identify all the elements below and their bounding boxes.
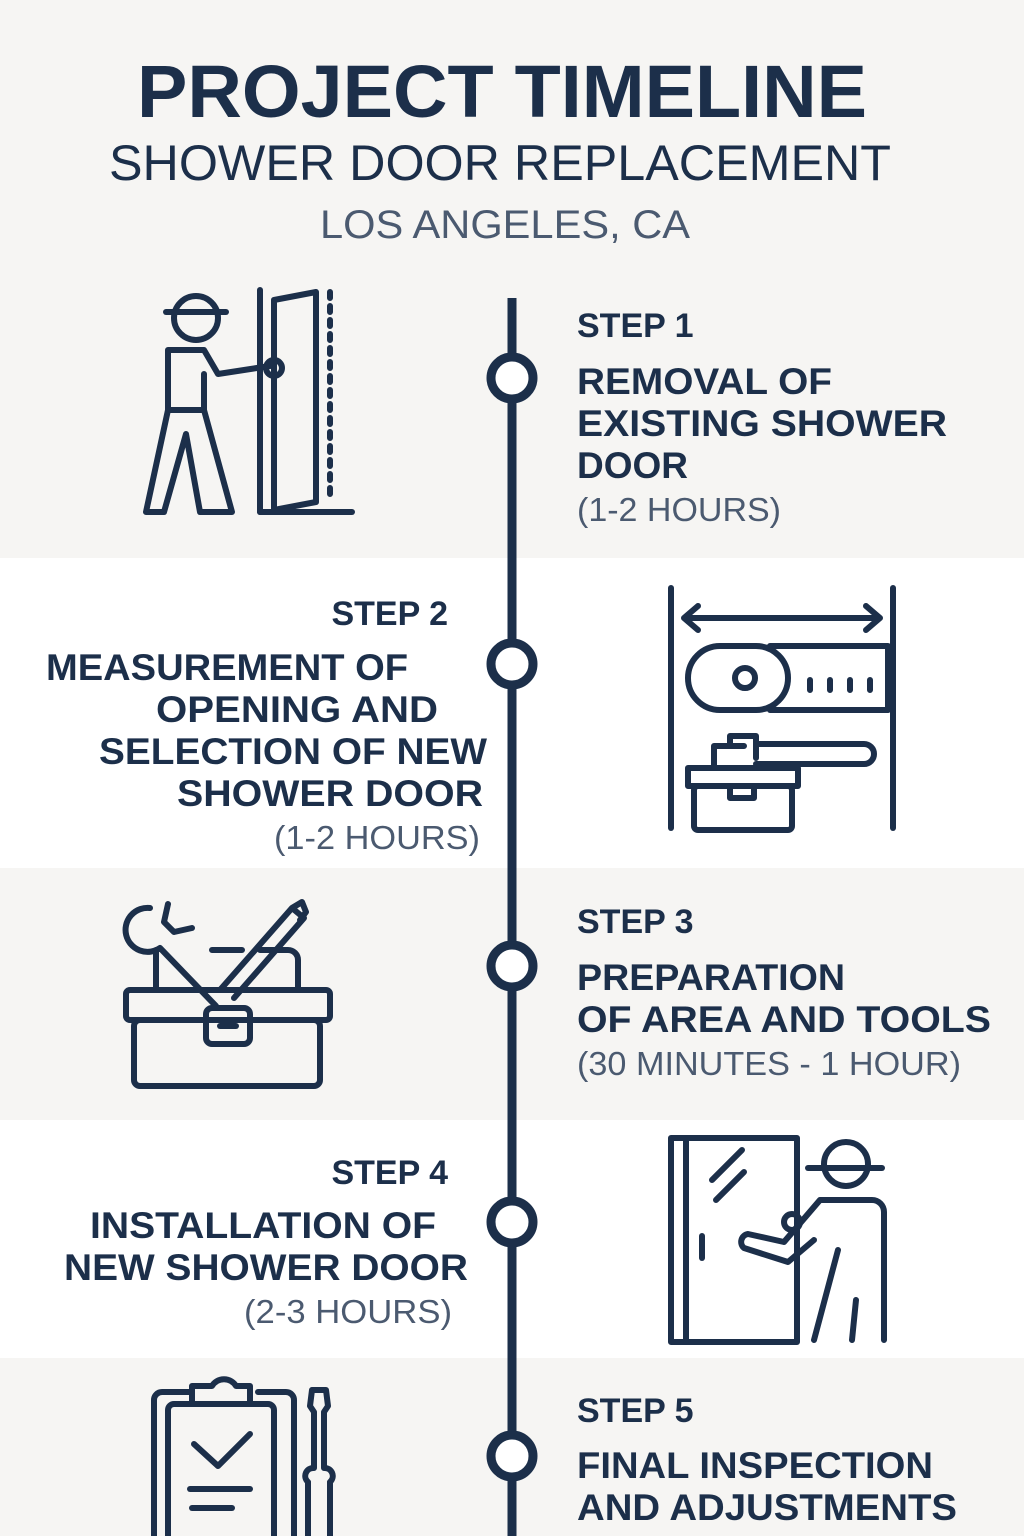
step 1 text: DOOR (577, 445, 688, 486)
step 3 text: PREPARATION (577, 957, 845, 998)
timeline line (491, 298, 533, 1536)
step 2 text: SELECTION OF NEW (99, 731, 487, 772)
step 3 text: (30 MINUTES - 1 HOUR) (577, 1045, 961, 1082)
title: LOS ANGELES, CA (320, 203, 690, 247)
title (109, 50, 891, 247)
icon: worker removing door (146, 290, 352, 512)
step 2 text: STEP 2 (331, 595, 448, 633)
title: PROJECT TIMELINE (137, 50, 867, 133)
step 1 text: STEP 1 (577, 307, 694, 345)
icon: clipboard and screwdriver (154, 1379, 333, 1536)
step 1 text: EXISTING SHOWER (577, 403, 947, 444)
step 3 text (577, 903, 991, 1082)
step 4 text (64, 1154, 468, 1330)
step 4 text: STEP 4 (331, 1154, 448, 1192)
step 1 text: REMOVAL OF (577, 361, 832, 402)
step 2 text: MEASUREMENT OF (46, 647, 408, 688)
step 1 text: (1-2 HOURS) (577, 491, 781, 528)
step 5 text: AND ADJUSTMENTS (577, 1487, 957, 1528)
step 3 text: STEP 3 (577, 903, 694, 941)
step 2 text: SHOWER DOOR (177, 773, 483, 814)
step 4 text: (2-3 HOURS) (244, 1293, 452, 1330)
icon: tape measure and toolbox (671, 588, 893, 830)
step 1 text (577, 307, 947, 528)
step 2 text (46, 595, 487, 856)
step 2 text: OPENING AND (156, 689, 438, 730)
step 5 text: FINAL INSPECTION (577, 1445, 933, 1486)
icon: toolbox (126, 902, 330, 1086)
step 2 text: (1-2 HOURS) (274, 819, 480, 856)
step 3 text: OF AREA AND TOOLS (577, 999, 991, 1040)
step 4 text: INSTALLATION OF (90, 1205, 436, 1246)
title: SHOWER DOOR REPLACEMENT (109, 135, 891, 191)
icon: worker installing door (671, 1138, 884, 1342)
step 4 text: NEW SHOWER DOOR (64, 1247, 468, 1288)
step 5 text (577, 1392, 957, 1528)
step 5 text: STEP 5 (577, 1392, 694, 1430)
